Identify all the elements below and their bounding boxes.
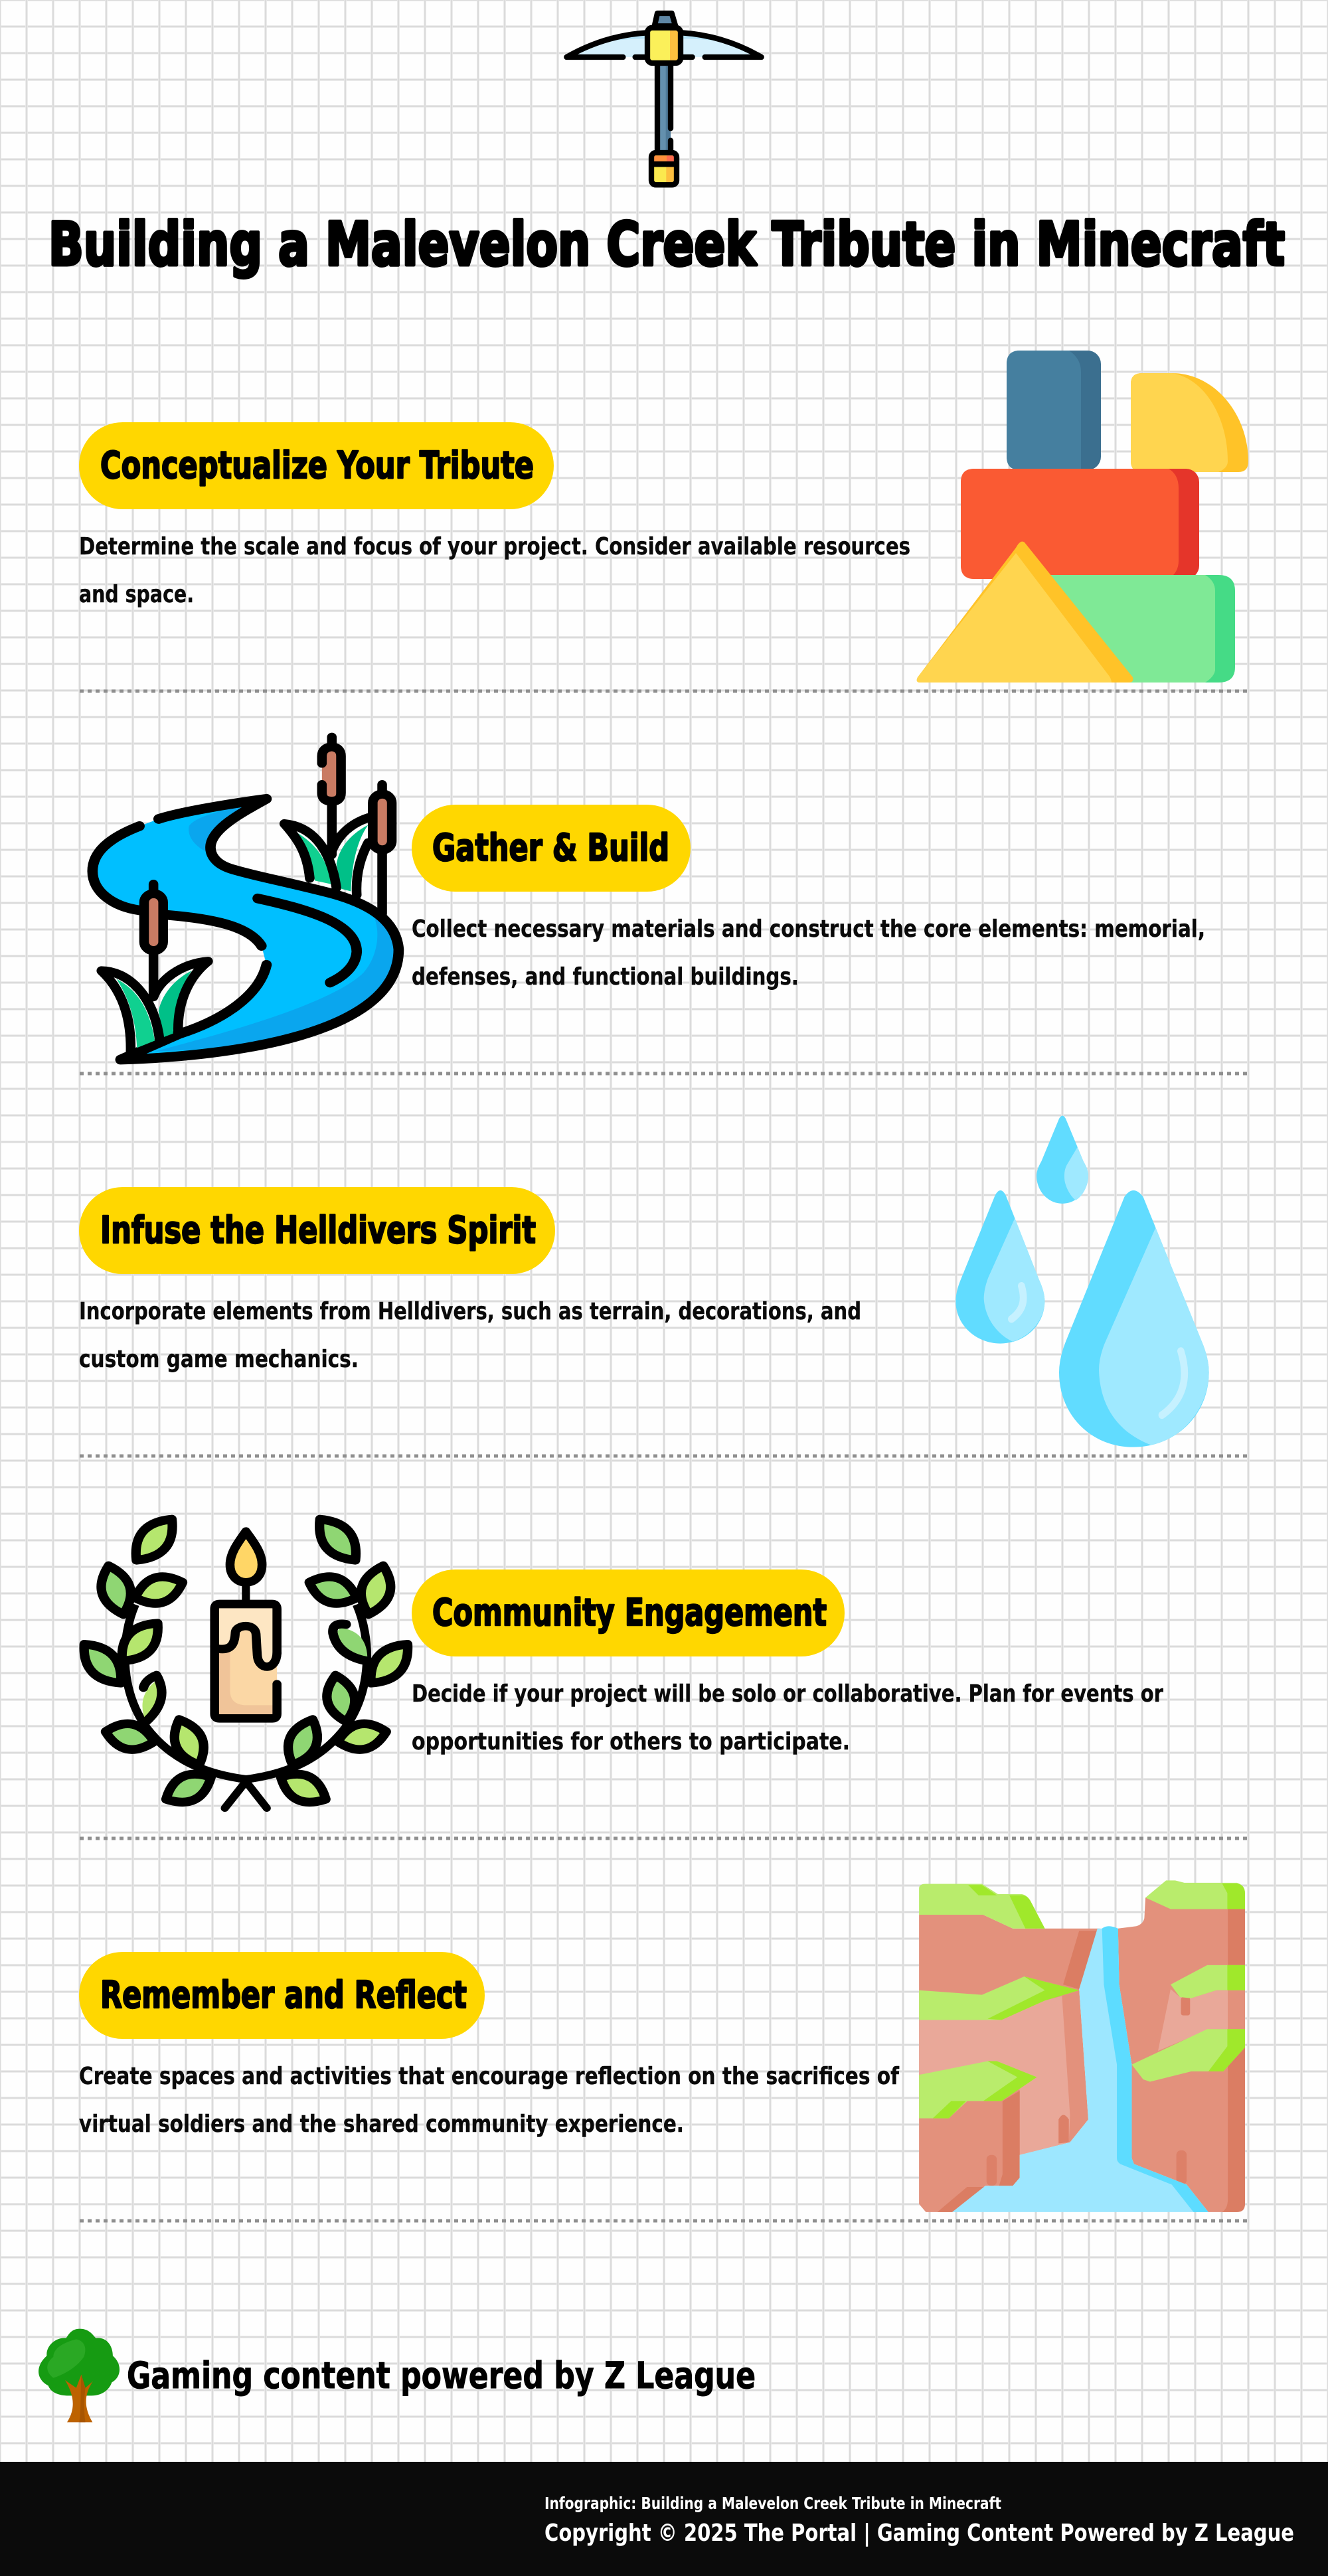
description: remember and reflect (79, 2063, 899, 2138)
footer caption: Infographic: Building a Malevelon Creek Tribute in Minecraft (544, 2494, 1001, 2513)
heading pill: infuse (79, 1187, 555, 1274)
sponsor text: Gaming content powered by Z League (127, 2354, 756, 2397)
heading pill: conceptualize: Conceptualize Your Tribute (100, 444, 534, 487)
heading pill: gather and build (412, 805, 691, 892)
heading pill: remember and reflect: Remember and Reflect (100, 1974, 467, 2017)
description: community engagement: Decide if your project will be solo or collaborative. Plan for events or (412, 1680, 1163, 1708)
heading pill: community engagement: Community Engagement (432, 1591, 827, 1635)
heading pill: conceptualize (79, 422, 554, 509)
description: remember and reflect: virtual soldiers and the shared community experience. (79, 2111, 684, 2138)
description: conceptualize: Determine the scale and focus of your project. Consider available resources (79, 533, 910, 560)
icon: water drops (955, 1116, 1209, 1447)
description: infuse (79, 1298, 861, 1373)
icon: canyon waterfall (919, 1880, 1245, 2212)
description: infuse: custom game mechanics. (79, 1346, 359, 1373)
panel: remember and reflect (79, 1880, 1245, 2212)
icon: pickaxe (566, 13, 762, 185)
description: gather and build: defenses, and functional buildings. (412, 963, 799, 991)
description: conceptualize (79, 533, 910, 608)
heading pill: community engagement (412, 1570, 845, 1656)
panel: gather and build (92, 737, 1205, 1060)
panel: community engagement (84, 1519, 1163, 1808)
right laurel branch (281, 1519, 408, 1802)
icon: candle in laurel wreath (84, 1519, 408, 1808)
description: community engagement (412, 1680, 1163, 1755)
description: remember and reflect: Create spaces and activities that encourage reflection on the sacrifices of (79, 2063, 899, 2090)
icon: river with cattails (92, 737, 398, 1060)
heading pill: remember and reflect (79, 1952, 485, 2039)
heading pill: infuse: Infuse the Helldivers Spirit (100, 1209, 536, 1252)
description: community engagement: opportunities for others to participate. (412, 1728, 850, 1755)
sponsor line (39, 2329, 756, 2422)
icon: toy building blocks (917, 351, 1248, 683)
left laurel branch (84, 1519, 211, 1802)
description: infuse: Incorporate elements from Helldivers, such as terrain, decorations, and (79, 1298, 861, 1325)
icon: tree (39, 2329, 120, 2422)
heading pill: gather and build: Gather & Build (432, 827, 669, 870)
description: gather and build (412, 916, 1205, 991)
panel: conceptualize your tribute (79, 351, 1248, 683)
footer bar (0, 2462, 1328, 2576)
panel: infuse the helldivers spirit (79, 1116, 1209, 1447)
description: conceptualize: and space. (79, 581, 194, 608)
